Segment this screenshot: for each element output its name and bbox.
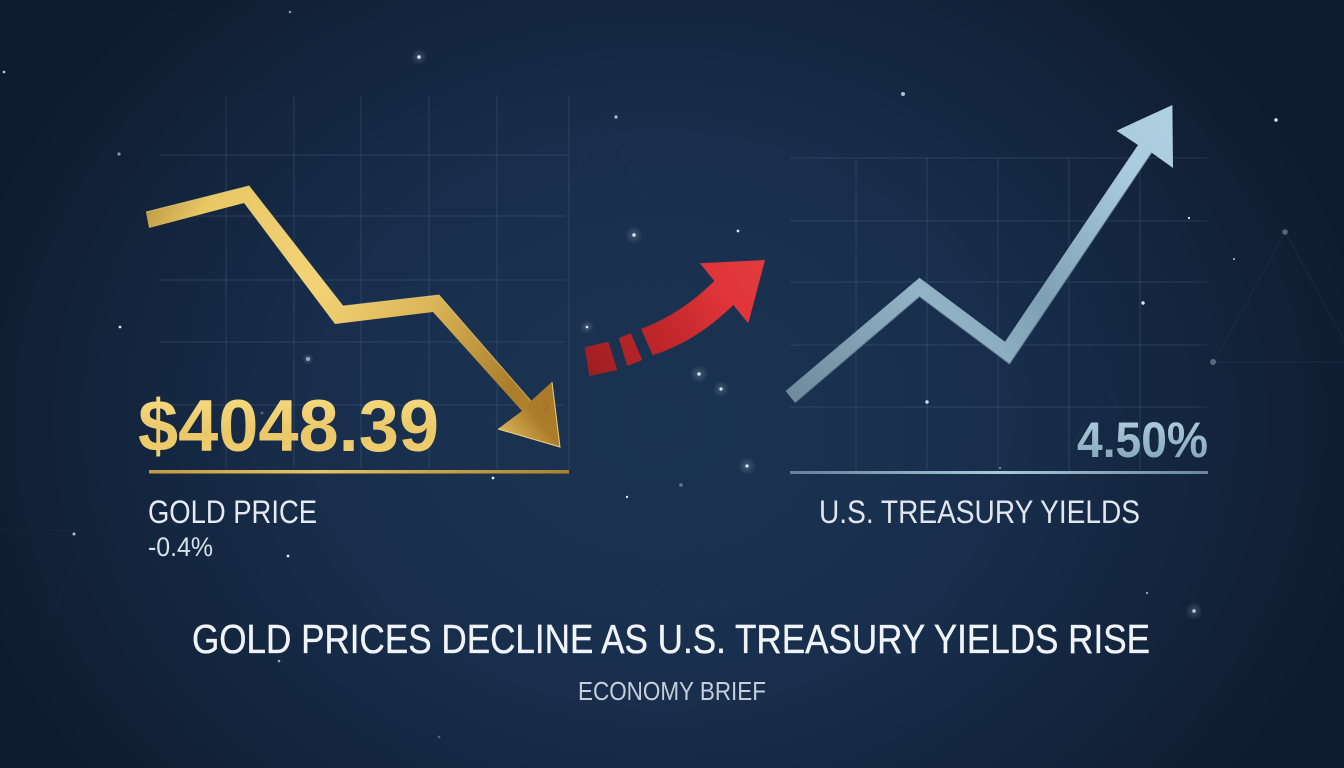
gold chart grid (160, 95, 569, 470)
yields underline (790, 471, 1208, 474)
yields chart grid (790, 158, 1207, 470)
background network lines (0, 113, 1344, 640)
gold price label: GOLD PRICE (148, 494, 317, 530)
panel: treasury yields (786, 105, 1208, 530)
yields rising arrow (786, 105, 1173, 403)
arrow: red connector (585, 260, 765, 376)
gold price value: $4048.39 (138, 386, 439, 467)
gold underline (149, 470, 569, 474)
yields value: 4.50% (1077, 412, 1208, 468)
subtitle: ECONOMY BRIEF (578, 676, 766, 706)
title: GOLD PRICES DECLINE AS U.S. TREASURY YIELDS RISE (192, 616, 1150, 662)
yields label: U.S. TREASURY YIELDS (819, 494, 1140, 530)
panel: gold price (138, 95, 569, 562)
gold price change: -0.4% (148, 532, 213, 562)
gold falling arrow (146, 186, 560, 447)
